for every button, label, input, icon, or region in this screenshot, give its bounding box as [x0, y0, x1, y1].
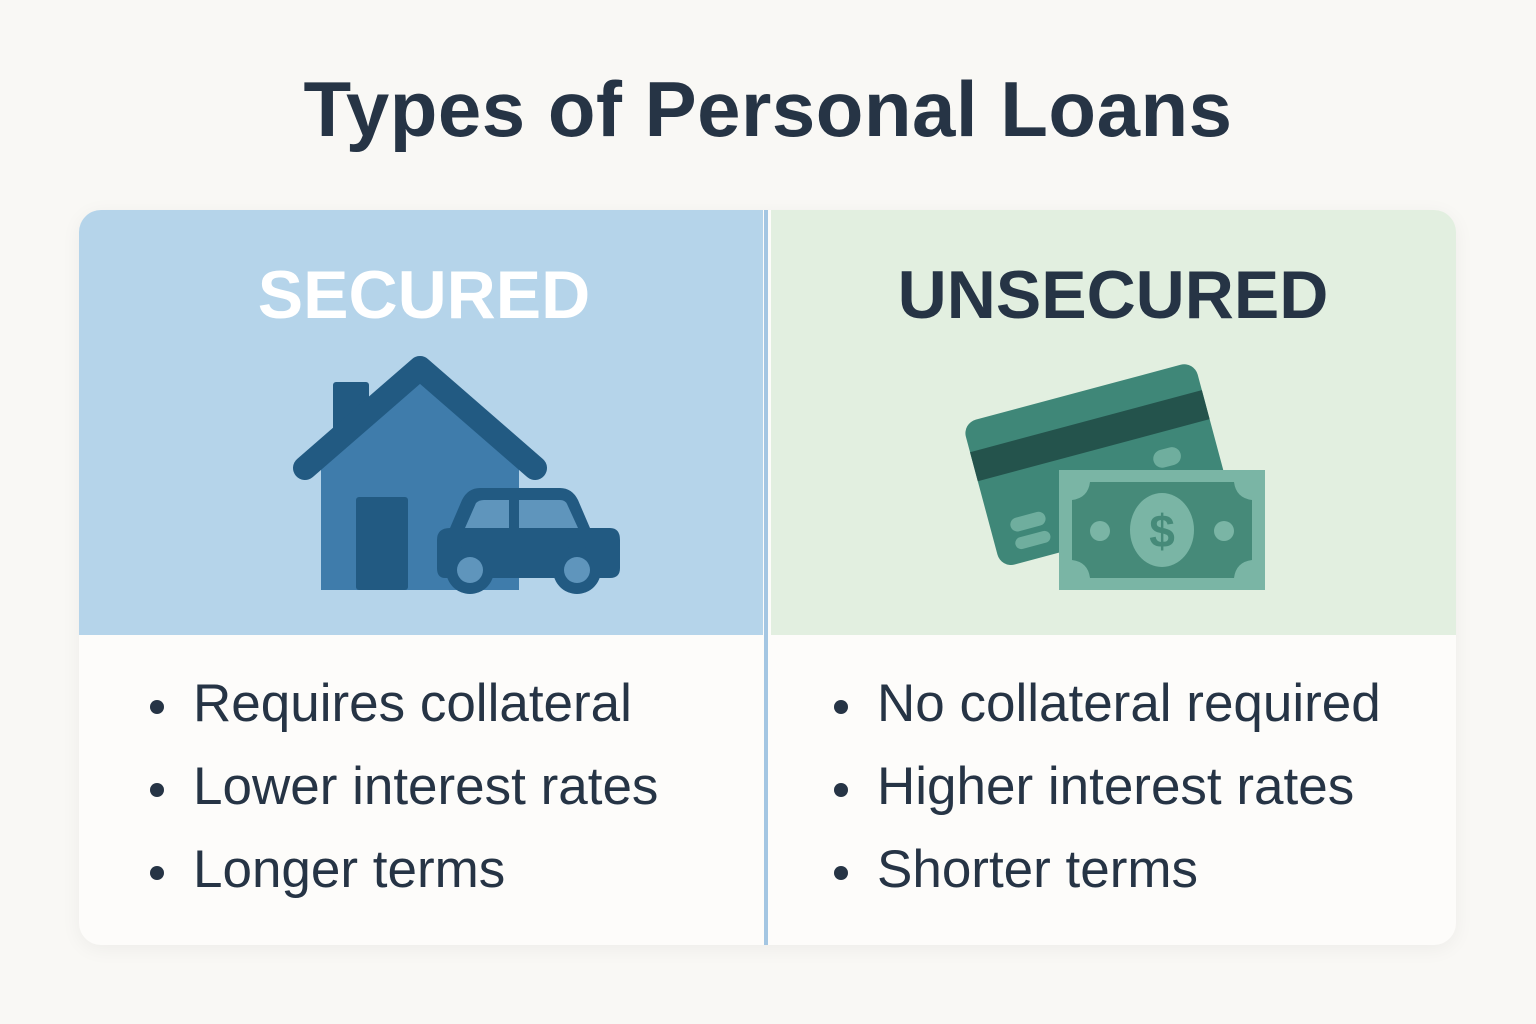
icon: credit card and cash: $	[1149, 505, 1175, 557]
list: secured	[150, 674, 658, 899]
heading: unsecured: UNSECURED	[898, 257, 1328, 333]
list: unsecured: No collateral required	[877, 674, 1381, 733]
panel: secured header	[79, 210, 763, 635]
divider	[764, 210, 768, 945]
panel: unsecured header	[771, 210, 1456, 635]
heading: secured: SECURED	[258, 257, 590, 333]
list: secured: Longer terms	[193, 840, 505, 899]
list: secured: Lower interest rates	[193, 757, 658, 816]
comparison card	[79, 210, 1456, 945]
title: Types of Personal Loans	[304, 65, 1232, 153]
list: unsecured	[834, 674, 1381, 899]
list: secured: Requires collateral	[193, 674, 632, 733]
list: unsecured: Shorter terms	[877, 840, 1198, 899]
list: unsecured: Higher interest rates	[877, 757, 1354, 816]
